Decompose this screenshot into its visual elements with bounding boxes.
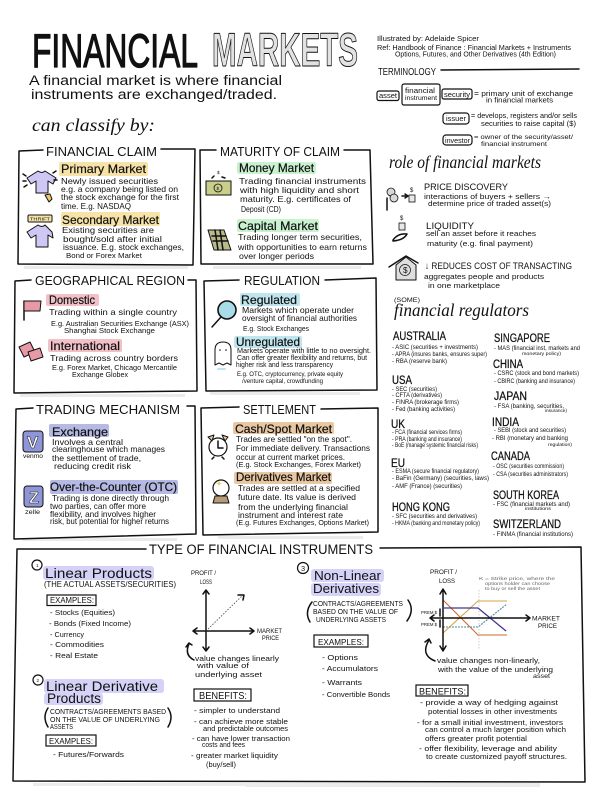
benefits: non-linear: can control a much larger position which bbox=[425, 725, 566, 734]
section 2: linear derivative products: ON THE VALUE OF UNDERLYING bbox=[50, 715, 160, 724]
benefits: linear bbox=[191, 689, 290, 769]
exchange: Exchange bbox=[52, 425, 108, 439]
regulators: left column: - ASIC (securities + investments) bbox=[392, 345, 478, 351]
price discovery bbox=[424, 182, 551, 208]
icon: venmo: venmo bbox=[23, 454, 44, 460]
benefits: non-linear: - for a small initial investment, investors bbox=[417, 718, 563, 727]
section 3: non-linear derivatives: BASED ON THE VALUE OF bbox=[313, 607, 398, 616]
icon: ghost bbox=[215, 342, 231, 370]
examples: linear products: - Real Estate bbox=[50, 651, 98, 660]
secondary market bbox=[61, 212, 184, 260]
over-the-counter: two parties, can offer more bbox=[50, 502, 146, 511]
over-the-counter: flexibility, and involves higher bbox=[50, 510, 156, 519]
chart: non-linear payoff: K = Strike price, where the bbox=[479, 576, 556, 581]
section 2: linear derivative products: Products bbox=[47, 691, 101, 706]
derivatives market bbox=[234, 470, 369, 527]
regulators: right column: monetary policy) bbox=[522, 351, 562, 356]
term: investor: = owner of the security/asset/ bbox=[474, 135, 573, 141]
regulators: left column: - BaFin (Germany) (securities, laws) bbox=[392, 476, 489, 482]
regulators: right column: insurance) bbox=[545, 408, 567, 413]
money market: maturity. E.g. certificates of bbox=[240, 195, 352, 204]
chart: non-linear payoff bbox=[421, 570, 560, 651]
regulators: left column: - CFTA (derivatives) bbox=[392, 393, 442, 399]
benefits: non-linear bbox=[416, 685, 567, 761]
regulators: right column bbox=[491, 333, 580, 538]
regulators: left column: - APRA (insures banks, ensures super) bbox=[392, 352, 487, 358]
cash/spot market: Trades are settled "on the spot". bbox=[236, 435, 352, 444]
examples: non-linear: - Accumulators bbox=[322, 664, 378, 673]
regulators: right column: INDIA bbox=[492, 417, 519, 429]
benefits: linear: - simpler to understand bbox=[194, 706, 280, 715]
section 1: linear products: (THE ACTUAL ASSETS/SECURITIES) bbox=[44, 580, 176, 589]
examples: linear products: - Commodities bbox=[50, 640, 104, 649]
liquidity: sell an asset before it reaches bbox=[426, 229, 536, 238]
regulators: left column: - FCA (financial services firms) bbox=[392, 430, 462, 436]
capital market: Capital Market bbox=[238, 219, 319, 233]
heading: trading mechanism: TRADING MECHANISM bbox=[36, 402, 180, 417]
liquidity: LIQUIDITY bbox=[426, 221, 475, 232]
examples: non-linear: - Warrants bbox=[322, 678, 362, 687]
regulators: right column: - OSC (securities commission) bbox=[493, 464, 564, 470]
credits: Ref: Handbook of Finance : Financial Markets + Instruments bbox=[377, 43, 571, 52]
unregulated: E.g. OTC, cryptocurrency, private equity bbox=[237, 372, 343, 378]
derivatives market: instrument and interest rate bbox=[238, 511, 343, 520]
cash/spot market bbox=[233, 422, 370, 469]
regulators: right column: - RBI (monetary and banking bbox=[492, 436, 568, 442]
domestic: Domestic bbox=[49, 293, 95, 307]
regulators: right column: institutions bbox=[525, 506, 552, 511]
examples: linear derivatives: - Futures/Forwards bbox=[53, 750, 124, 759]
examples: non-linear: EXAMPLES: bbox=[318, 638, 364, 647]
regulated: E.g. Stock Exchanges bbox=[243, 324, 309, 333]
title: MARKETS bbox=[212, 23, 358, 76]
chart: non-linear payoff: LOSS bbox=[439, 579, 455, 585]
chart: linear payoff: PRICE bbox=[262, 636, 279, 642]
benefits: linear: (buy/sell) bbox=[206, 760, 236, 769]
reduces cost of transacting: ↓ REDUCES COST OF TRANSACTING bbox=[425, 261, 572, 272]
section 1: linear products: Linear Products bbox=[45, 565, 152, 581]
regulators: left column: - SFC (securities and derivatives) bbox=[392, 514, 477, 520]
domestic: Shanghai Stock Exchange bbox=[64, 326, 155, 335]
chart: linear payoff: LOSS bbox=[200, 580, 212, 586]
price discovery: PRICE DISCOVERY bbox=[424, 182, 509, 193]
term: issuer bbox=[443, 111, 577, 128]
over-the-counter: risk, but potential for higher returns bbox=[50, 517, 169, 526]
regulators: right column: - FSA (banking, securities, bbox=[494, 404, 564, 410]
primary market: the stock exchange for the first bbox=[61, 193, 180, 202]
icon: flag bbox=[24, 301, 41, 320]
heading: financial claim: FINANCIAL CLAIM bbox=[46, 144, 157, 159]
benefits: linear: and predictable outcomes bbox=[203, 724, 288, 733]
regulators: left column: - HKMA (banking and monetary policy) bbox=[392, 521, 480, 527]
benefits: non-linear: - provide a way of hedging against bbox=[420, 698, 558, 707]
money market: Deposit (CD) bbox=[241, 205, 281, 214]
term: asset, financial instrument, security: = primary unit of exchange bbox=[474, 89, 573, 98]
cash/spot market: For immediate delivery. Transactions bbox=[236, 444, 370, 453]
regulators: right column: - MAS (financial inst, markets and bbox=[494, 346, 580, 352]
chart: non-linear payoff: PROFIT / bbox=[430, 570, 457, 576]
domestic: Trading within a single country bbox=[49, 308, 178, 317]
icon: thrift t-shirt: THRIFT bbox=[30, 216, 50, 222]
section 2: linear derivative products: CONTRACTS/AGREEMENTS BASED bbox=[50, 707, 166, 716]
derivatives market: from the underlying financial bbox=[238, 503, 348, 512]
icon: magnifying glass bbox=[212, 301, 236, 327]
heading: type of financial instruments: TYPE OF FINANCIAL INSTRUMENTS bbox=[149, 542, 373, 557]
regulated bbox=[240, 293, 357, 333]
section 3: non-linear derivatives: 3 bbox=[301, 564, 305, 573]
chart: non-linear payoff: PREM $ bbox=[421, 622, 438, 627]
cash/spot market: (E.g. Stock Exchanges, Forex Market) bbox=[236, 460, 361, 469]
credits: Illustrated by: Adelaide Spicer bbox=[377, 34, 480, 43]
chart: non-linear payoff: options holder can choose bbox=[485, 581, 551, 586]
term: asset, financial instrument, security: asset bbox=[379, 91, 397, 100]
icon: venmo: V bbox=[27, 433, 39, 452]
regulators: right column: - CSRC (stock and bond markets) bbox=[494, 371, 579, 377]
section 2: linear derivative products: ASSETS bbox=[50, 722, 73, 731]
derivatives market: Derivatives Market bbox=[236, 470, 332, 484]
primary market: Newly issued securities bbox=[61, 177, 158, 186]
price discovery: interactions of buyers + sellers → bbox=[424, 192, 551, 201]
benefits: non-linear: to create customized payoff structures. bbox=[426, 752, 567, 761]
domestic: E.g. Australian Securities Exchange (ASX) bbox=[51, 319, 189, 328]
term: asset, financial instrument, security: security bbox=[444, 90, 470, 99]
section 3: non-linear derivatives: UNDERLYING ASSETS bbox=[316, 615, 386, 624]
reduces cost of transacting bbox=[424, 261, 572, 290]
international: E.g. Forex Market, Chicago Mercantile bbox=[52, 363, 177, 372]
regulators: left column: UK bbox=[391, 419, 405, 431]
examples: linear products: EXAMPLES: bbox=[50, 596, 94, 605]
regulators: left column: AUSTRALIA bbox=[393, 331, 446, 343]
derivatives market: (E.g. Futures Exchanges, Options Market) bbox=[236, 518, 369, 527]
unregulated: Markets operate with little to no oversight. bbox=[237, 346, 371, 355]
benefits: non-linear: - offer flexibility, leverage and ability bbox=[419, 744, 557, 753]
icon: money: $ bbox=[217, 170, 220, 175]
regulators: left column: - ESMA (secure financial regulatory) bbox=[392, 469, 479, 475]
icon: crystal ball bbox=[213, 480, 229, 503]
section 2: linear derivative products: Linear Derivative bbox=[46, 679, 158, 694]
regulators: right column: SWITZERLAND bbox=[493, 519, 561, 531]
chart: non-linear payoff: MARKET bbox=[532, 616, 560, 622]
reduces cost of transacting: aggregates people and products bbox=[424, 272, 544, 281]
note: non-linear value change: asset bbox=[533, 674, 550, 680]
note: non-linear value change bbox=[437, 656, 553, 680]
regulators: left column: - SEC (securities) bbox=[392, 387, 437, 393]
note: linear value change: underlying asset bbox=[195, 670, 262, 679]
benefits: non-linear: potential losses in other investments bbox=[428, 707, 557, 716]
secondary market: bought/sold after initial bbox=[63, 235, 162, 244]
term: investor: investor bbox=[445, 136, 471, 145]
examples: non-linear: - Options bbox=[322, 653, 358, 662]
over-the-counter: Over-the-Counter (OTC) bbox=[50, 480, 177, 494]
term: asset, financial instrument, security: in financial markets bbox=[486, 96, 553, 104]
examples: non-linear bbox=[314, 635, 390, 699]
regulators: left column: - FINRA (brokerage firms) bbox=[392, 400, 459, 406]
exchange: clearinghouse which manages bbox=[52, 445, 165, 454]
regulators: left column bbox=[391, 331, 489, 527]
panel: trading mechanism bbox=[14, 402, 196, 541]
benefits: linear: costs and fees bbox=[202, 740, 245, 749]
domestic bbox=[46, 293, 189, 335]
over-the-counter bbox=[50, 480, 178, 526]
icon: zelle bbox=[24, 486, 43, 516]
examples: linear products: - Stocks (Equities) bbox=[50, 608, 115, 617]
icon: alarm clock bbox=[208, 435, 228, 459]
regulators: right column: CANADA bbox=[491, 451, 530, 463]
subtitle: A financial market is where financial bbox=[29, 73, 282, 88]
regulators: right column: JAPAN bbox=[494, 391, 527, 403]
icon: house with dollar cycle: $ bbox=[403, 266, 408, 275]
exchange: reducing credit risk bbox=[54, 462, 132, 471]
chart: non-linear payoff: PREM $ bbox=[421, 610, 438, 615]
examples: linear derivatives: EXAMPLES: bbox=[49, 737, 93, 746]
regulators: right column: - CSA (securities administrators) bbox=[493, 472, 568, 478]
examples: linear derivatives bbox=[46, 735, 124, 759]
regulators: right column: SOUTH KOREA bbox=[493, 490, 559, 502]
examples: linear products: - Currency bbox=[50, 630, 84, 639]
heading: can classify by: can classify by: bbox=[32, 115, 155, 135]
term: issuer: securities to raise capital ($) bbox=[481, 119, 576, 128]
regulators: right column: - SEBI (stock and securities) bbox=[494, 428, 566, 434]
international: Trading across country borders bbox=[50, 354, 178, 363]
over-the-counter: Trading is done directly through bbox=[52, 494, 169, 503]
secondary market: Bond or Forex Market bbox=[66, 251, 142, 260]
panel: settlement bbox=[201, 402, 378, 539]
secondary market: Secondary Market bbox=[62, 213, 160, 227]
international: Exchange Globex bbox=[72, 370, 128, 379]
term: issuer: issuer bbox=[446, 114, 467, 123]
primary market bbox=[59, 162, 180, 211]
reduces cost of transacting: in one marketplace bbox=[428, 281, 500, 290]
unregulated bbox=[234, 335, 371, 385]
terminology: TERMINOLOGY bbox=[378, 67, 436, 78]
icon: thrift t-shirt bbox=[27, 215, 53, 247]
icon: crossed flags bbox=[19, 342, 43, 361]
secondary market: issuance. E.g. stock exchanges, bbox=[63, 243, 184, 252]
regulators: right column: SINGAPORE bbox=[494, 333, 550, 345]
regulators: left column: - PRA (banking and insurance) bbox=[392, 437, 462, 443]
liquidity: maturity (e.g. final payment) bbox=[427, 239, 533, 248]
regulators: left column: - RBA (reserve bank) bbox=[392, 359, 447, 365]
regulators: right column: CHINA bbox=[493, 359, 523, 371]
title: FINANCIAL bbox=[32, 24, 198, 77]
cash/spot market: occur at current market prices. bbox=[236, 453, 345, 462]
section 3: non-linear derivatives: Derivatives bbox=[313, 582, 379, 596]
primary market: e.g. a company being listed on bbox=[61, 185, 178, 194]
unregulated: /venture capital, crowdfunding bbox=[242, 379, 323, 385]
chart: non-linear payoff: to buy or sell the asset bbox=[485, 586, 541, 591]
icon: hand with asset bbox=[393, 216, 407, 241]
liquidity bbox=[426, 221, 536, 248]
icon: people and price bbox=[387, 188, 415, 210]
panel: geographical region bbox=[14, 273, 197, 397]
examples: linear products bbox=[47, 595, 131, 660]
unregulated: Can offer greater flexibility and returns, but bbox=[237, 353, 367, 362]
section 3: non-linear derivatives: CONTRACTS/AGREEMENTS bbox=[313, 599, 403, 608]
credits: Options, Futures, and Other Derivatives (4th Edition) bbox=[395, 50, 556, 58]
unregulated: higher risk and less transparency bbox=[236, 360, 333, 369]
panel: maturity of claim bbox=[200, 144, 373, 269]
secondary market: Existing securities are bbox=[62, 226, 155, 235]
heading: geographical region: GEOGRAPHICAL REGION bbox=[35, 273, 185, 288]
benefits: non-linear: BENEFITS: bbox=[419, 686, 466, 698]
unregulated: Unregulated bbox=[236, 335, 300, 349]
icon: house with dollar cycle bbox=[389, 256, 418, 280]
icon: new t-shirt with tag bbox=[23, 171, 57, 202]
regulators: left column: - AMF (France) (securities) bbox=[392, 484, 462, 490]
icon: zelle: Z bbox=[29, 490, 39, 507]
money market: Money Market bbox=[239, 161, 315, 175]
regulators: right column: - FSC (financial markets and) bbox=[493, 502, 570, 508]
heading: financial regulators: (SOME) bbox=[394, 298, 420, 304]
cash/spot market: Cash/Spot Market bbox=[235, 422, 333, 436]
term: asset, financial instrument, security bbox=[377, 84, 573, 105]
panel: regulation bbox=[204, 273, 377, 395]
exchange bbox=[49, 424, 165, 471]
panel: type of financial instruments bbox=[13, 542, 585, 787]
capital market: over longer periods bbox=[239, 252, 314, 261]
chart: non-linear payoff: PRICE bbox=[538, 624, 557, 630]
note: linear value change: with value of bbox=[196, 661, 250, 670]
international: International bbox=[50, 339, 120, 353]
term: investor bbox=[443, 135, 573, 148]
regulators: right column: - FINMA (financial institutions) bbox=[493, 532, 573, 538]
primary market: time. E.g. NASDAQ bbox=[61, 202, 131, 211]
capital market bbox=[237, 219, 367, 261]
icon: hand with asset: $ bbox=[400, 216, 404, 222]
term: asset, financial instrument, security: financial bbox=[405, 86, 435, 95]
icon: venmo bbox=[23, 431, 44, 460]
regulators: left column: USA bbox=[392, 375, 412, 387]
price discovery: determine price of traded asset(s) bbox=[428, 199, 551, 208]
panel: financial claim bbox=[18, 144, 195, 269]
section 3: non-linear derivatives bbox=[298, 562, 411, 699]
note: non-linear value change: value changes non-linearly, bbox=[437, 656, 540, 665]
regulators: left column: - Fed (banking activities) bbox=[392, 407, 455, 413]
examples: non-linear: - Convertible Bonds bbox=[322, 690, 390, 699]
international bbox=[48, 339, 178, 379]
exchange: the settlement of trade, bbox=[52, 454, 141, 463]
benefits: linear: - greater market liquidity bbox=[191, 751, 278, 760]
credits bbox=[377, 34, 571, 58]
term: issuer: = develops, registers and/or sells bbox=[471, 111, 577, 120]
arrow: non-linear note bbox=[425, 639, 435, 661]
capital market: Trading longer term securities, bbox=[238, 233, 362, 242]
regulators: left column: - BoE (manage systemic financial risks) bbox=[392, 443, 478, 449]
benefits: non-linear: offers greater profit potential bbox=[425, 734, 527, 743]
primary market: Primary Market bbox=[61, 162, 147, 176]
chart: linear payoff bbox=[191, 571, 282, 651]
chart: linear payoff: MARKET bbox=[257, 629, 282, 635]
money market: Trading financial instruments bbox=[239, 177, 366, 186]
benefits: linear: BENEFITS: bbox=[199, 691, 247, 702]
regulators: right column: regulation) bbox=[548, 442, 573, 447]
money market bbox=[237, 161, 366, 214]
heading: financial regulators: financial regulators bbox=[394, 300, 529, 320]
section 1: linear products bbox=[32, 560, 176, 660]
capital market: with opportunities to earn returns bbox=[237, 243, 367, 252]
subtitle bbox=[29, 73, 282, 102]
money market: with high liquidity and short bbox=[239, 186, 360, 195]
heading: maturity of claim: MATURITY OF CLAIM bbox=[220, 144, 340, 159]
heading: settlement: SETTLEMENT bbox=[243, 402, 316, 417]
icon: money: $ bbox=[216, 186, 220, 191]
heading: role of financial markets: role of financial markets bbox=[389, 152, 541, 172]
chart: linear payoff: PROFIT / bbox=[191, 571, 216, 577]
section 3: non-linear derivatives: Non-Linear bbox=[314, 569, 381, 583]
section 2: linear derivative products: 2 bbox=[36, 678, 40, 683]
derivatives market: future date. Its value is derived bbox=[238, 493, 356, 502]
regulated: Markets which operate under bbox=[242, 306, 354, 315]
exchange: Involves a central bbox=[52, 438, 123, 447]
regulated: Regulated bbox=[241, 293, 297, 307]
note: linear value change bbox=[195, 654, 279, 679]
regulators: right column: - CBIRC (banking and insurance) bbox=[494, 379, 575, 385]
subtitle: instruments are exchanged/traded. bbox=[31, 87, 277, 102]
term: asset, financial instrument, security: instrument bbox=[405, 96, 437, 102]
derivatives market: Trades are settled at a specified bbox=[238, 484, 360, 493]
regulators: left column: HONG KONG bbox=[392, 502, 450, 514]
term: investor: financial instrument bbox=[481, 142, 547, 148]
benefits: linear: - can have lower transaction bbox=[192, 734, 290, 743]
regulators: left column: EU bbox=[391, 458, 405, 470]
note: linear value change: value changes linearly bbox=[195, 654, 279, 663]
heading: regulation: REGULATION bbox=[244, 273, 320, 288]
benefits: linear: - can achieve more stable bbox=[194, 717, 288, 726]
examples: linear products: - Bonds (Fixed Income) bbox=[49, 619, 131, 628]
note: non-linear value change: with the value of the underlying bbox=[437, 665, 553, 674]
section 2: linear derivative products bbox=[33, 675, 171, 759]
icon: zelle: zelle bbox=[25, 510, 41, 516]
regulated: oversight of financial authorities bbox=[242, 314, 357, 323]
icon: money bbox=[206, 170, 231, 195]
section 1: linear products: 1 bbox=[36, 563, 39, 568]
terminology bbox=[377, 67, 579, 148]
icon: people and price: $ bbox=[410, 188, 414, 194]
arrow: linear note bbox=[186, 643, 194, 660]
icon: calendar bbox=[208, 230, 231, 250]
